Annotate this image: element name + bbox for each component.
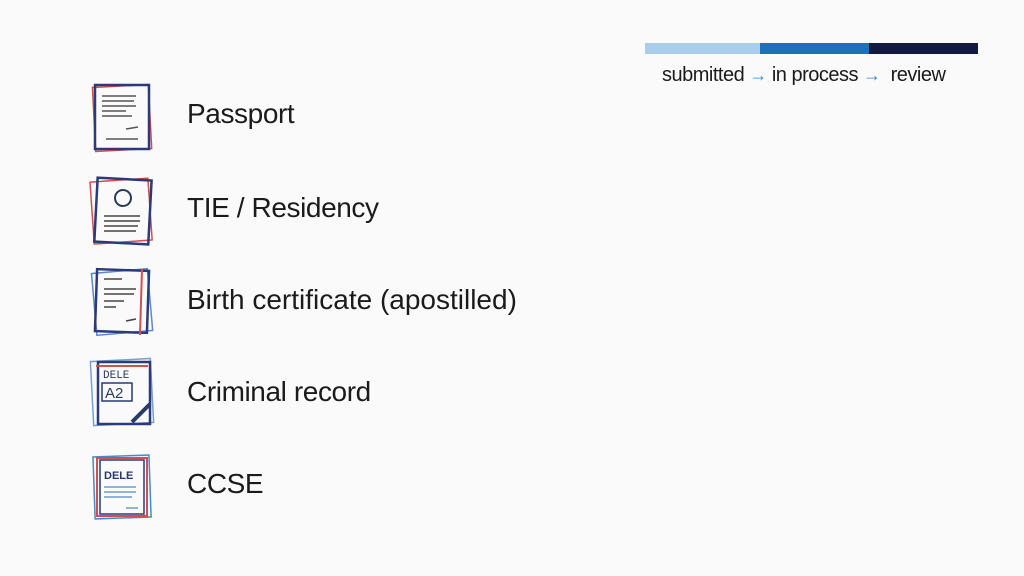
progress labels: submitted → in process → review: [662, 64, 945, 86]
label: birth certificate: Birth certificate (apostilled): [187, 284, 517, 315]
label: passport: Passport: [187, 98, 294, 129]
icon: CCSE document: [92, 454, 152, 520]
label: CCSE: CCSE: [187, 468, 263, 499]
progress bar: [645, 43, 978, 54]
icon: CCSE document: DELE: [104, 470, 133, 482]
icon: DELE A2 document: [90, 358, 154, 426]
icon: residency document: [89, 176, 153, 246]
label: TIE / Residency: TIE / Residency: [187, 192, 379, 223]
label: criminal record: Criminal record: [187, 376, 371, 407]
icon: DELE A2 document: A2: [105, 385, 123, 402]
icon: birth certificate: [90, 268, 154, 336]
icon: DELE A2 document: DELE: [103, 370, 130, 382]
icon: passport document: [92, 84, 152, 152]
